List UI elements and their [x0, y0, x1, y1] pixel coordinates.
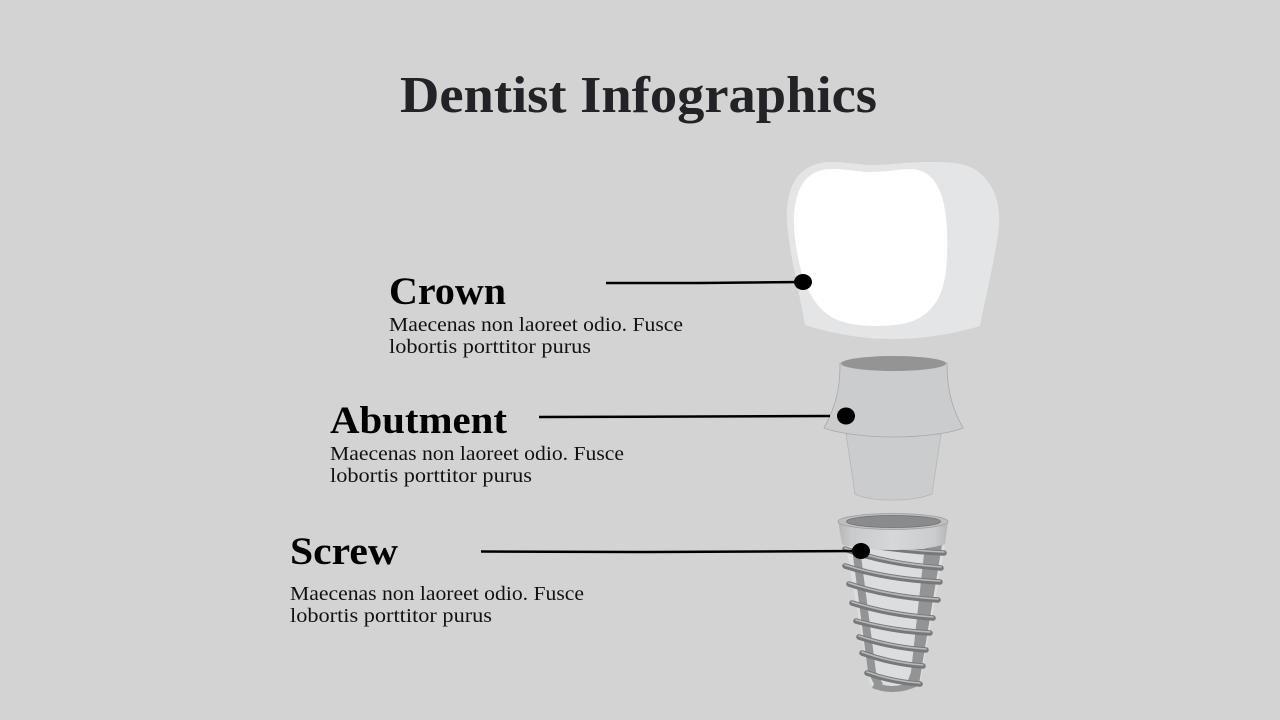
callout: screw — [290, 530, 870, 627]
screw body — [846, 546, 945, 690]
callout: abutment — [330, 399, 855, 487]
heading: crown: Crown — [389, 270, 506, 313]
marker: screw — [852, 543, 870, 559]
illustration: dental implant — [787, 162, 999, 692]
text block: abutment: Maecenas non laoreet odio. Fusce — [330, 443, 624, 465]
screw threads — [845, 546, 944, 684]
text block: screw: lobortis porttitor purus — [290, 605, 492, 627]
screw collar — [838, 521, 948, 550]
marker: abutment — [837, 408, 855, 424]
leader line: crown — [606, 282, 803, 283]
marker: crown — [794, 274, 812, 290]
heading: screw: Screw — [290, 530, 398, 573]
heading: abutment: Abutment — [330, 399, 507, 442]
screw — [838, 514, 948, 692]
text block: crown: Maecenas non laoreet odio. Fusce — [389, 314, 683, 336]
leader line: abutment — [539, 416, 830, 417]
title: Dentist Infographics — [400, 67, 877, 124]
text block: screw: Maecenas non laoreet odio. Fusce — [290, 583, 584, 605]
abutment — [824, 356, 963, 500]
screw shading — [852, 545, 942, 692]
leader line: screw — [481, 551, 861, 552]
callout: crown — [389, 270, 812, 358]
text block: crown: lobortis porttitor purus — [389, 336, 591, 358]
text block: abutment: lobortis porttitor purus — [330, 465, 532, 487]
crown — [787, 162, 999, 339]
